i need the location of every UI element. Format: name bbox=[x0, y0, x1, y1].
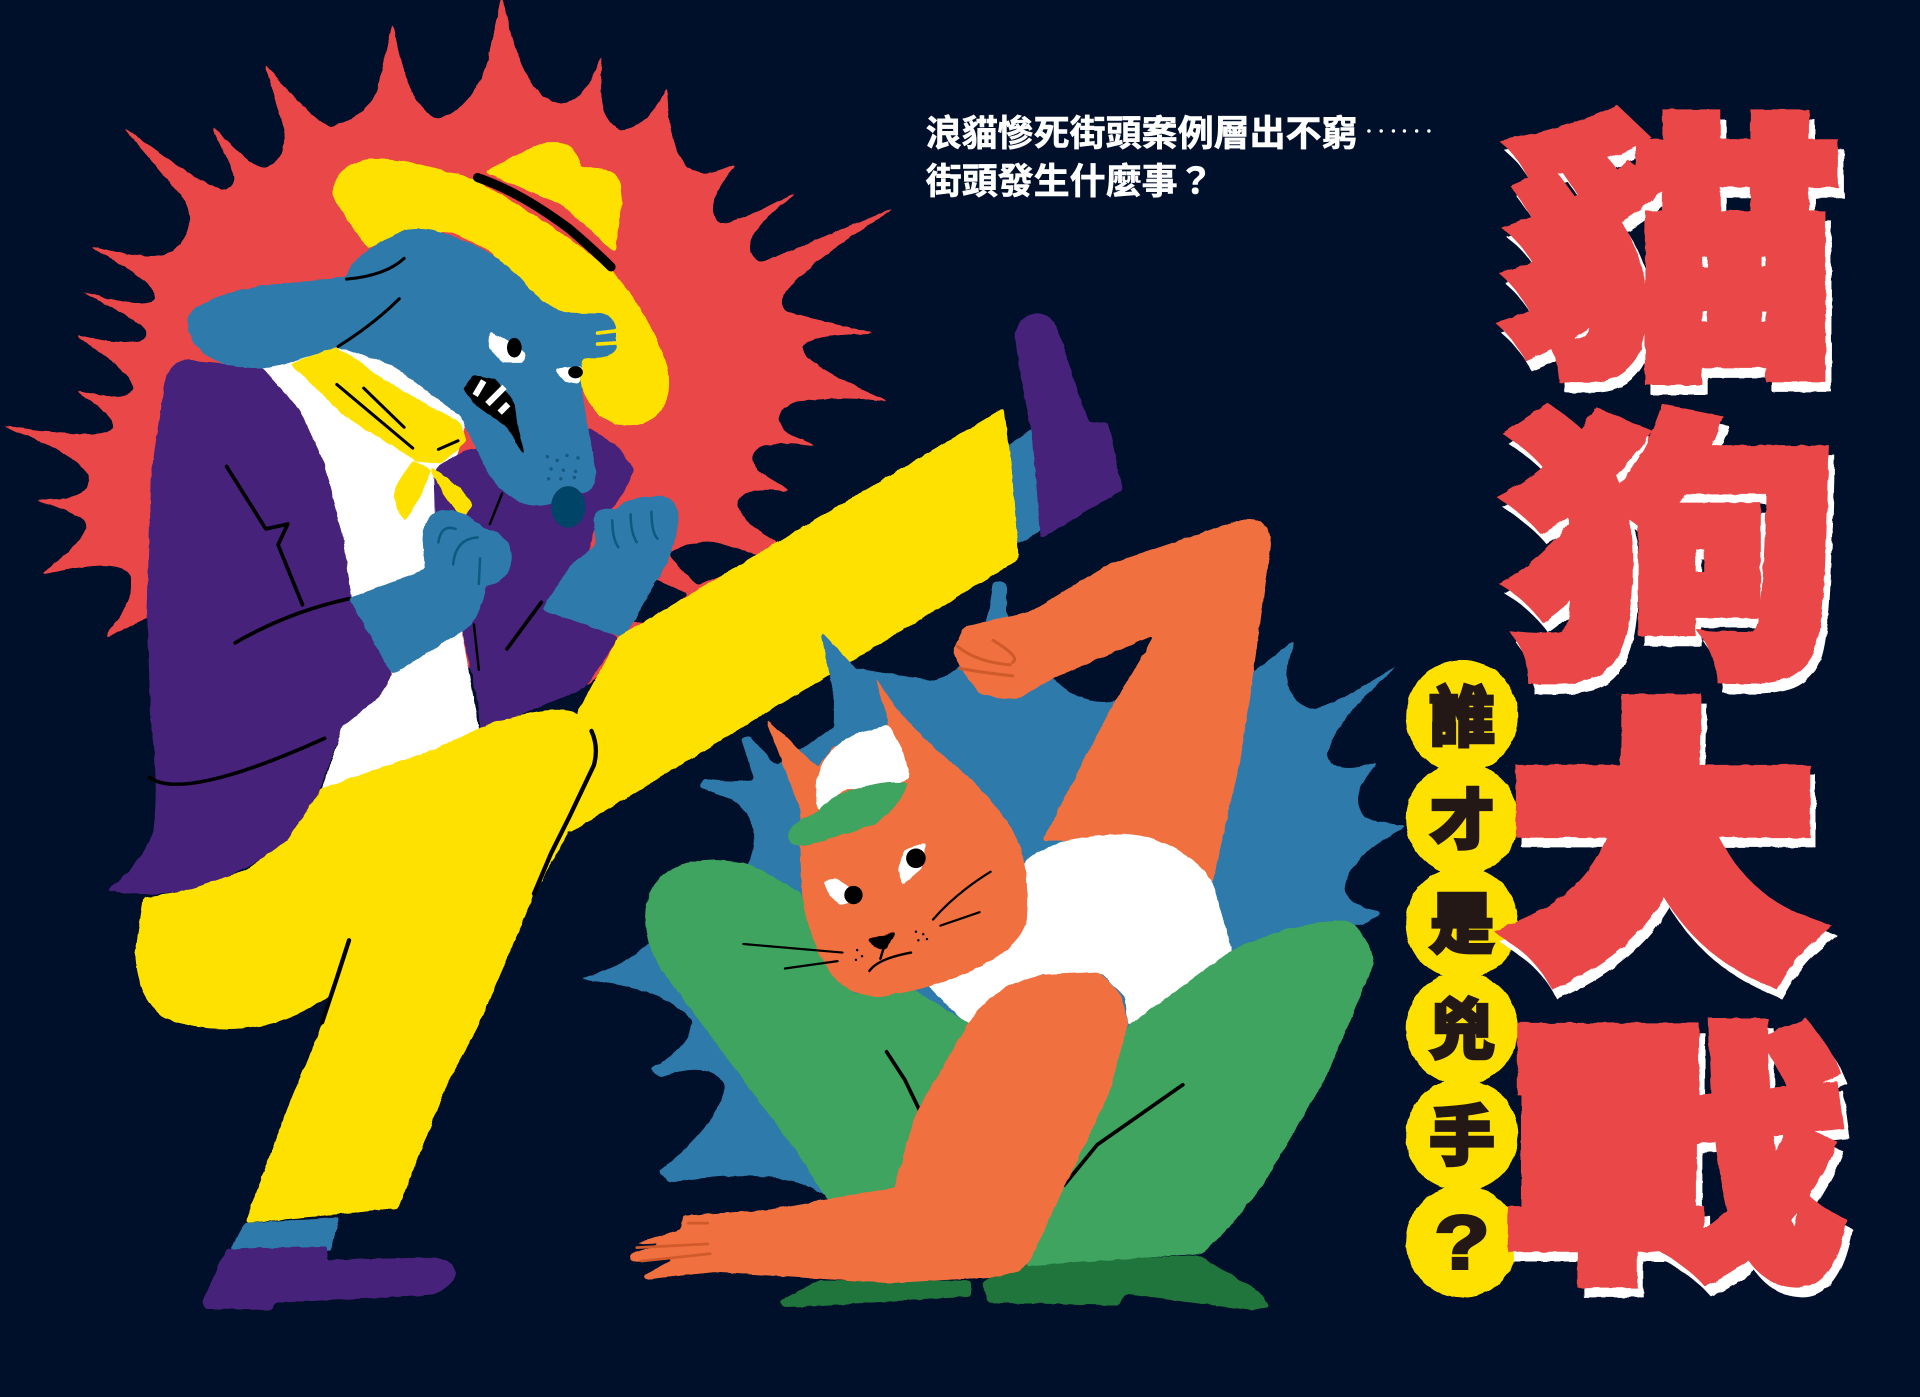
cat cap dome bbox=[816, 725, 910, 812]
title character 狗: 狗 bbox=[1506, 398, 1839, 712]
title character 大: 大 bbox=[1517, 696, 1808, 1002]
head and ear bbox=[188, 229, 616, 505]
fist lines bbox=[958, 640, 1015, 676]
right arm bbox=[541, 496, 678, 638]
snarling mouth bbox=[463, 375, 527, 460]
cat cap brim bbox=[788, 782, 909, 845]
circle 誰 bbox=[1406, 660, 1518, 773]
green left leg bbox=[645, 860, 973, 1202]
hat band bbox=[478, 178, 611, 267]
left arm bbox=[349, 510, 512, 675]
red burst behind dog bbox=[0, 0, 904, 686]
dog eye left bbox=[489, 331, 527, 362]
dog yellow trousers bbox=[135, 408, 1019, 1310]
cat feet bbox=[779, 1255, 1270, 1310]
whiskers bbox=[743, 872, 991, 968]
circle 是 bbox=[1406, 867, 1518, 979]
ear lines bbox=[338, 258, 404, 346]
intro line 1: 浪貓慘死街頭案例層出不窮 bbox=[926, 113, 1358, 154]
circle 兇 bbox=[1406, 972, 1518, 1085]
title character 戰: 戰 bbox=[1507, 1008, 1843, 1314]
white vest bbox=[927, 834, 1232, 1026]
circle 手 bbox=[1406, 1079, 1518, 1191]
gaps in red burst near the fist bbox=[631, 542, 765, 623]
green right leg bbox=[1026, 919, 1374, 1266]
circle 誰: 誰 bbox=[1429, 682, 1495, 756]
finger lines bbox=[438, 512, 658, 584]
dog hat bbox=[333, 142, 669, 426]
dog nose bbox=[551, 486, 585, 528]
subtitle: yellow circles bbox=[1406, 660, 1518, 1298]
hat crown bbox=[484, 142, 622, 252]
jacket right panel bbox=[434, 429, 634, 731]
jacket fold lines bbox=[149, 466, 541, 784]
blue burst behind cat bbox=[577, 581, 1412, 1224]
cat head bbox=[765, 665, 1027, 997]
intro line 2: 街頭發生什麼事？ bbox=[926, 160, 1214, 201]
scarf fold lines bbox=[337, 384, 458, 449]
kicking leg bbox=[539, 408, 1019, 833]
title character 戰: 戰 bbox=[1513, 1017, 1849, 1324]
dog head bbox=[188, 229, 618, 528]
title character 貓: 貓 bbox=[1503, 99, 1839, 413]
dog eye right bbox=[554, 366, 583, 384]
ellipsis dots bbox=[1367, 129, 1431, 133]
dog raised foot bbox=[1007, 313, 1123, 547]
cat bbox=[631, 519, 1374, 1310]
cat eye right bbox=[898, 842, 926, 885]
standing leg bbox=[135, 710, 595, 1223]
purple shoe bbox=[202, 1246, 456, 1310]
paw lines bbox=[637, 1223, 710, 1261]
white shirt bbox=[257, 331, 480, 793]
cat nose and mouth bbox=[867, 932, 911, 971]
teeth bbox=[475, 381, 508, 413]
muzzle dots bbox=[546, 454, 580, 480]
intro text bbox=[926, 113, 1431, 201]
circle 是: 是 bbox=[1429, 889, 1495, 963]
title character 貓: 貓 bbox=[1509, 109, 1845, 423]
hat hair strokes bbox=[598, 331, 618, 344]
circle 兇: 兇 bbox=[1429, 994, 1495, 1068]
yellow scarf bbox=[290, 346, 473, 522]
title character 大: 大 bbox=[1522, 706, 1814, 1012]
jacket left panel bbox=[107, 360, 392, 894]
dog arms and fists bbox=[349, 496, 678, 675]
circle 手: 手 bbox=[1429, 1100, 1495, 1174]
circle 才: 才 bbox=[1429, 785, 1495, 859]
title 貓狗大戰 bbox=[1503, 99, 1849, 1324]
blue ankle bbox=[1007, 422, 1048, 547]
purple shoe bbox=[1015, 313, 1123, 539]
hat brim bbox=[333, 159, 669, 426]
circle question mark: ? bbox=[1434, 1200, 1490, 1285]
title character 狗: 狗 bbox=[1512, 408, 1845, 722]
cat raised arm bbox=[953, 519, 1271, 884]
trouser crease: knee bbox=[322, 940, 349, 1022]
whisker dots bbox=[855, 931, 928, 961]
blue ankle bbox=[229, 1217, 339, 1251]
circle question mark bbox=[1406, 1185, 1518, 1298]
trouser crease: hip bbox=[534, 731, 596, 894]
cat eye left bbox=[823, 878, 863, 905]
dog body bbox=[107, 331, 634, 894]
leg crease lines bbox=[887, 1052, 1183, 1185]
cat front arm bbox=[631, 972, 1128, 1283]
circle 才 bbox=[1406, 763, 1518, 875]
